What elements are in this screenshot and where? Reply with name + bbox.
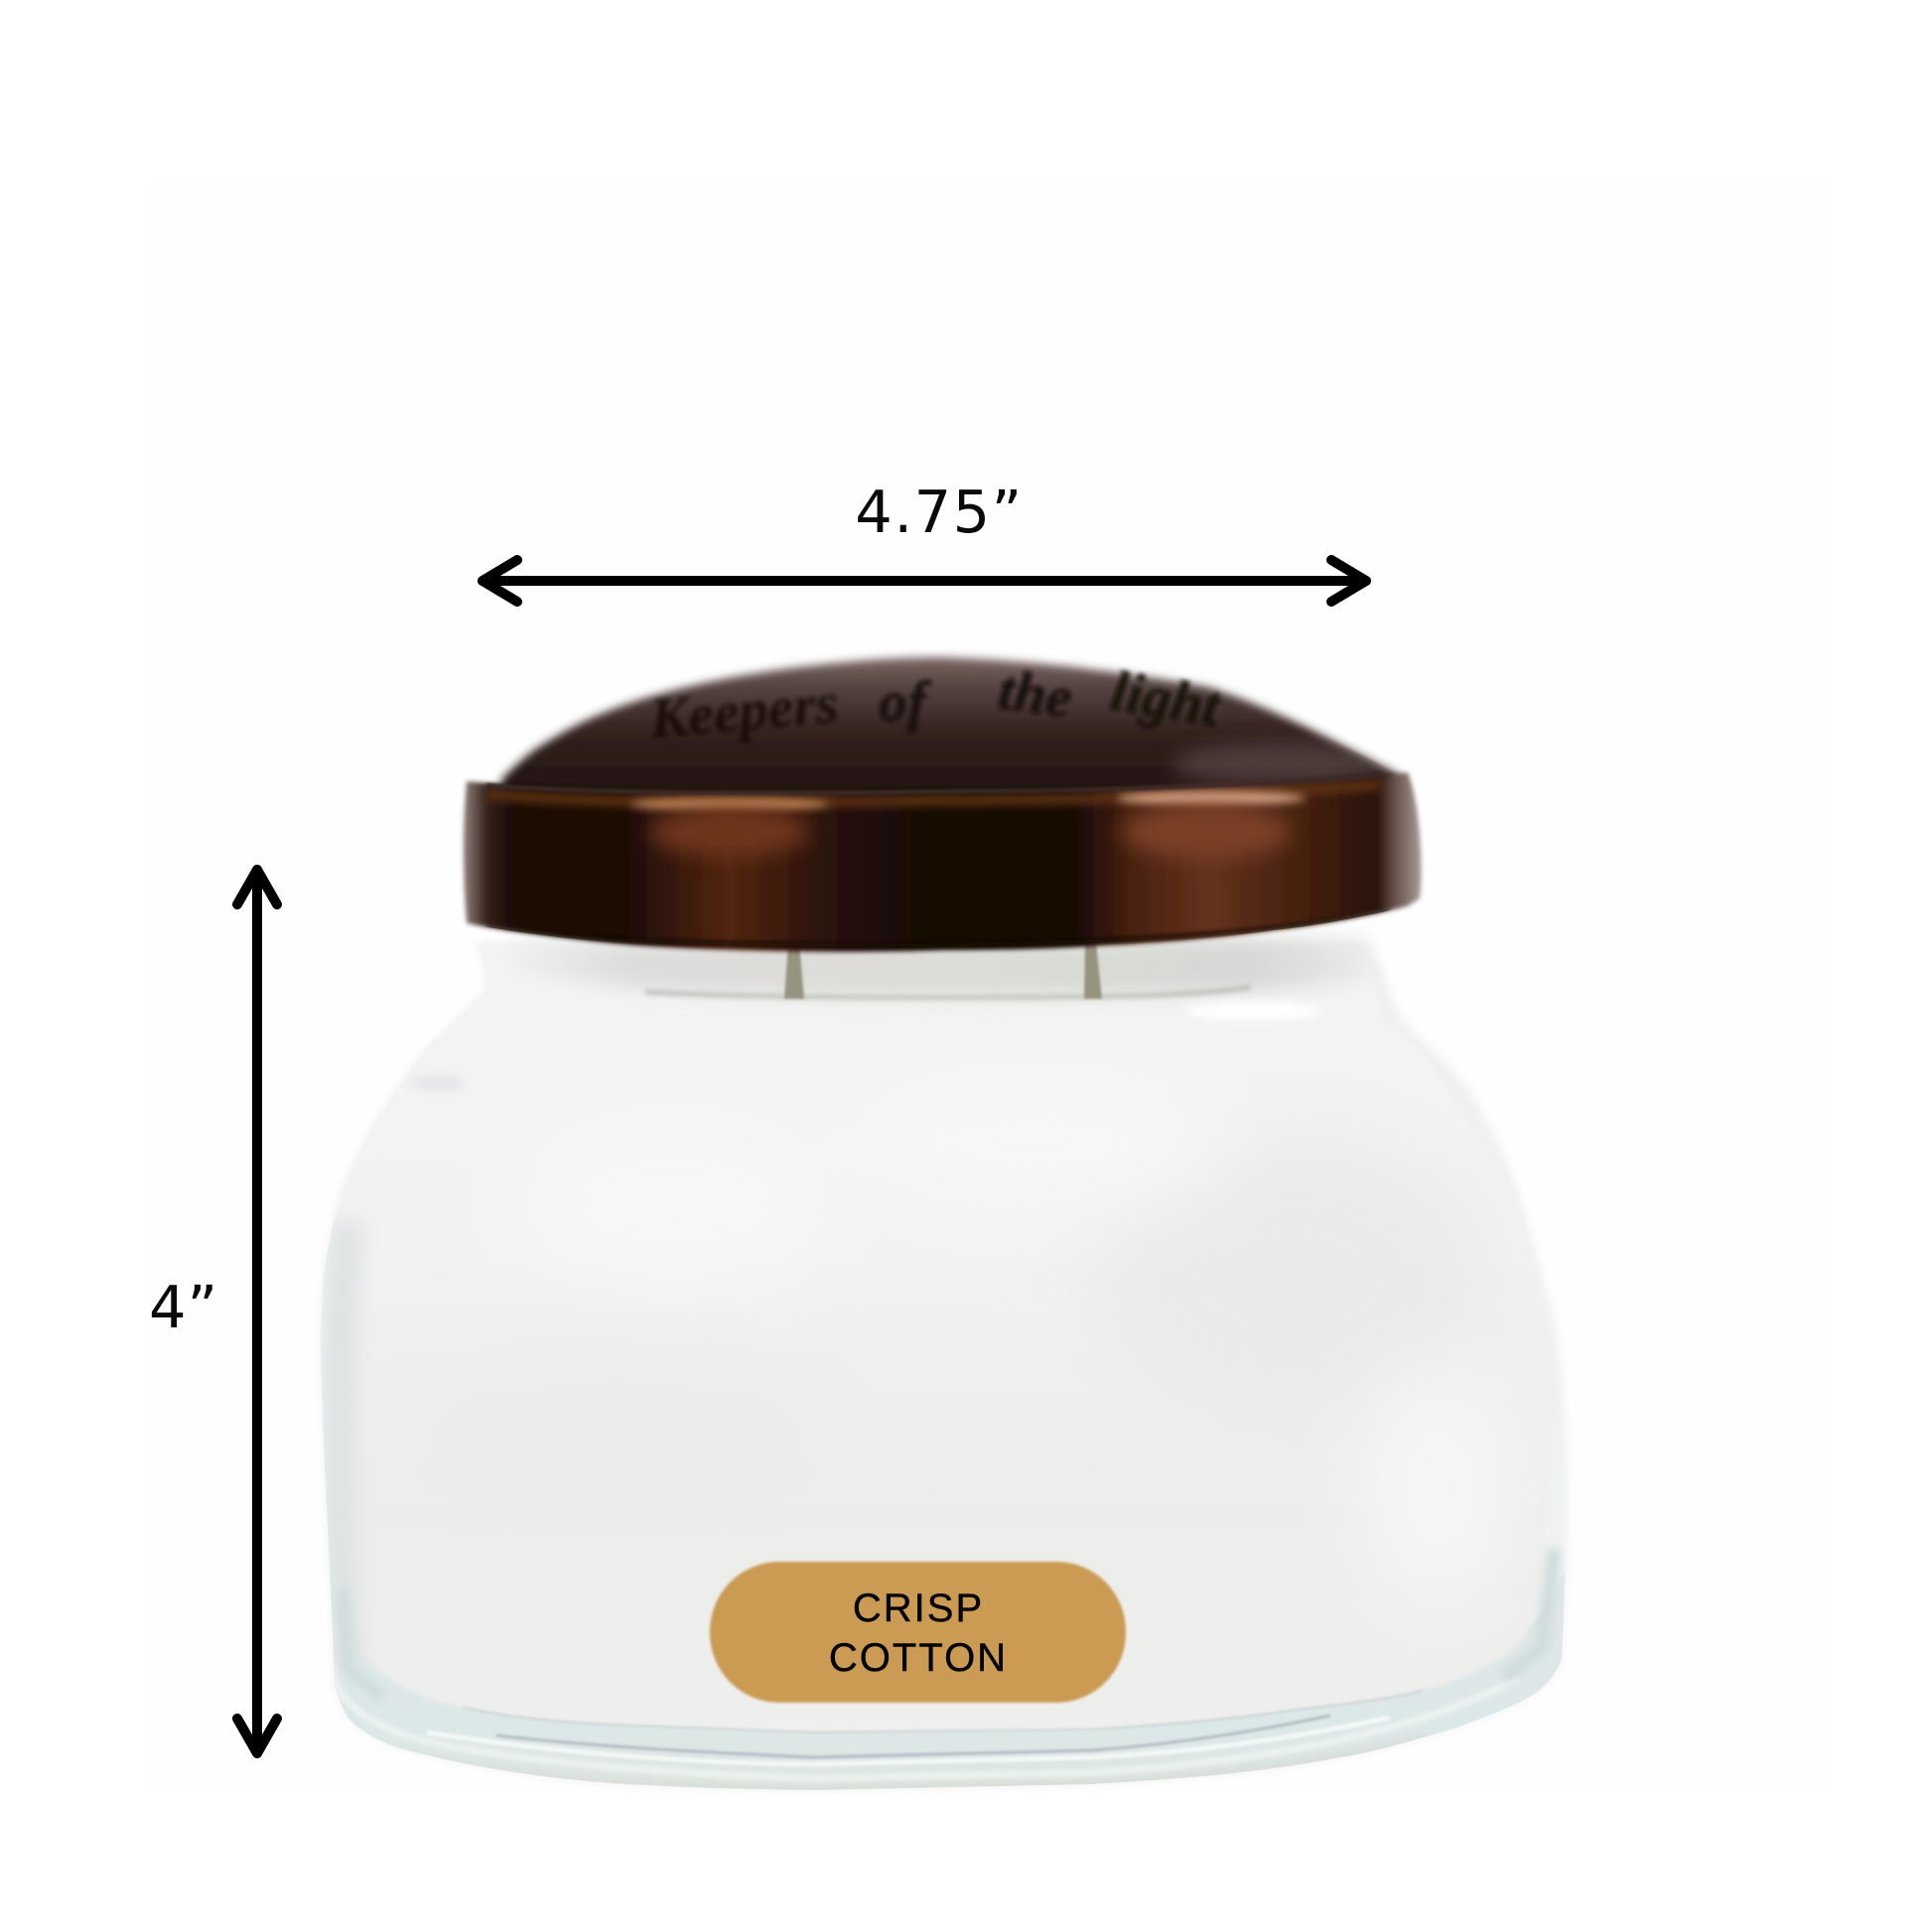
jar glass body [321,943,1568,1790]
height label: 4” [149,1273,218,1341]
height dimension arrow [237,870,277,1753]
engraved lid text: of [879,669,932,734]
engraved lid text: the [995,657,1076,730]
width dimension arrow [483,560,1366,602]
candle jar [318,943,1569,1797]
label text: cotton: COTTON [829,1636,1008,1680]
engraved lid text: Keepers [646,670,841,751]
lid [464,657,1422,952]
wax fill [320,1078,1564,1724]
label [710,1562,1126,1703]
neck shadow band [506,938,1380,1033]
engraved lid text: light [1107,658,1226,739]
glass base [334,1573,1565,1790]
wax bottom edge line [464,1691,1423,1732]
label text: crisp: CRISP [853,1587,984,1630]
lid rim [464,772,1422,952]
lid dome [501,657,1398,809]
glass base line [496,1716,1330,1757]
engraved lid text [646,657,1226,751]
wicks [784,943,1102,999]
photo backdrop [151,179,1833,1793]
width label: 4.75” [855,478,1024,546]
